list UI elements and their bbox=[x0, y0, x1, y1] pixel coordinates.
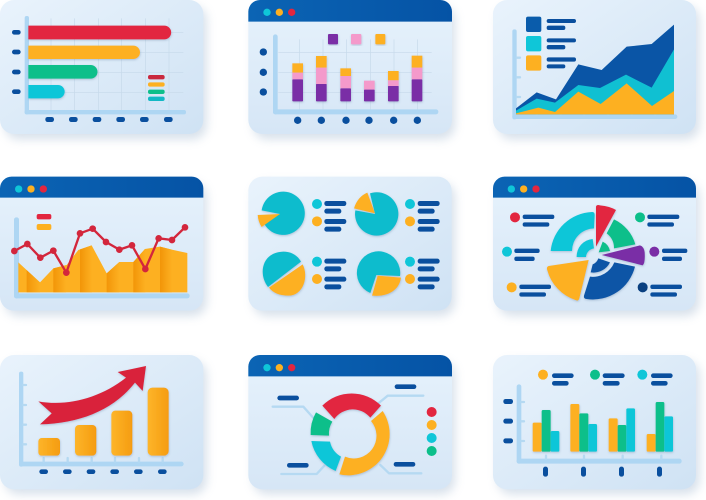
legend bullets bbox=[312, 199, 415, 284]
legend squares bbox=[328, 34, 385, 44]
panel: horizontal bar chart bbox=[0, 0, 207, 139]
pie top left bbox=[258, 192, 305, 235]
stacked columns bbox=[292, 56, 422, 101]
panel: donut chart window bbox=[248, 355, 455, 494]
window title bar bbox=[248, 0, 452, 22]
window title bar bbox=[0, 177, 203, 198]
panel: four pie charts bbox=[248, 177, 455, 316]
legend bbox=[148, 75, 165, 101]
panel: growth bars with arrow bbox=[0, 355, 207, 494]
pie bottom left bbox=[263, 252, 305, 296]
panel: exploded radial chart window bbox=[493, 177, 700, 316]
grouped columns bbox=[533, 402, 673, 452]
radial segments bbox=[547, 205, 645, 301]
axes bbox=[25, 16, 186, 114]
legend bullets bbox=[502, 212, 659, 292]
horizontal bars bbox=[28, 26, 171, 98]
axes bbox=[14, 217, 190, 298]
axes bbox=[273, 34, 438, 114]
legend lines bbox=[514, 215, 687, 297]
donut segments bbox=[311, 393, 390, 475]
axis labels bbox=[12, 30, 173, 122]
window title bar bbox=[248, 355, 452, 376]
axis markers bbox=[260, 48, 421, 124]
pie bottom right bbox=[357, 251, 401, 296]
axis labels bbox=[39, 469, 167, 474]
axis labels bbox=[503, 399, 662, 477]
red line series bbox=[11, 224, 188, 276]
window title bar bbox=[493, 177, 696, 198]
stacked areas bbox=[516, 25, 674, 114]
arrow: upward trend bbox=[38, 366, 146, 424]
axes bbox=[512, 29, 677, 119]
legend dots bbox=[427, 407, 437, 456]
panel: grouped column chart bbox=[493, 355, 700, 494]
pie top right bbox=[354, 192, 398, 236]
legend lines bbox=[324, 201, 440, 289]
panel: line and area chart window bbox=[0, 177, 207, 316]
amber area chart bbox=[18, 245, 187, 293]
axes bbox=[517, 384, 682, 464]
callout leaders and labels bbox=[273, 384, 423, 474]
legend bbox=[37, 214, 51, 230]
panel: layered area chart bbox=[493, 0, 700, 139]
legend bbox=[526, 17, 576, 71]
rising columns bbox=[38, 388, 169, 456]
panel: stacked column chart window bbox=[248, 0, 455, 139]
legend bbox=[538, 370, 673, 386]
axes bbox=[19, 372, 184, 467]
